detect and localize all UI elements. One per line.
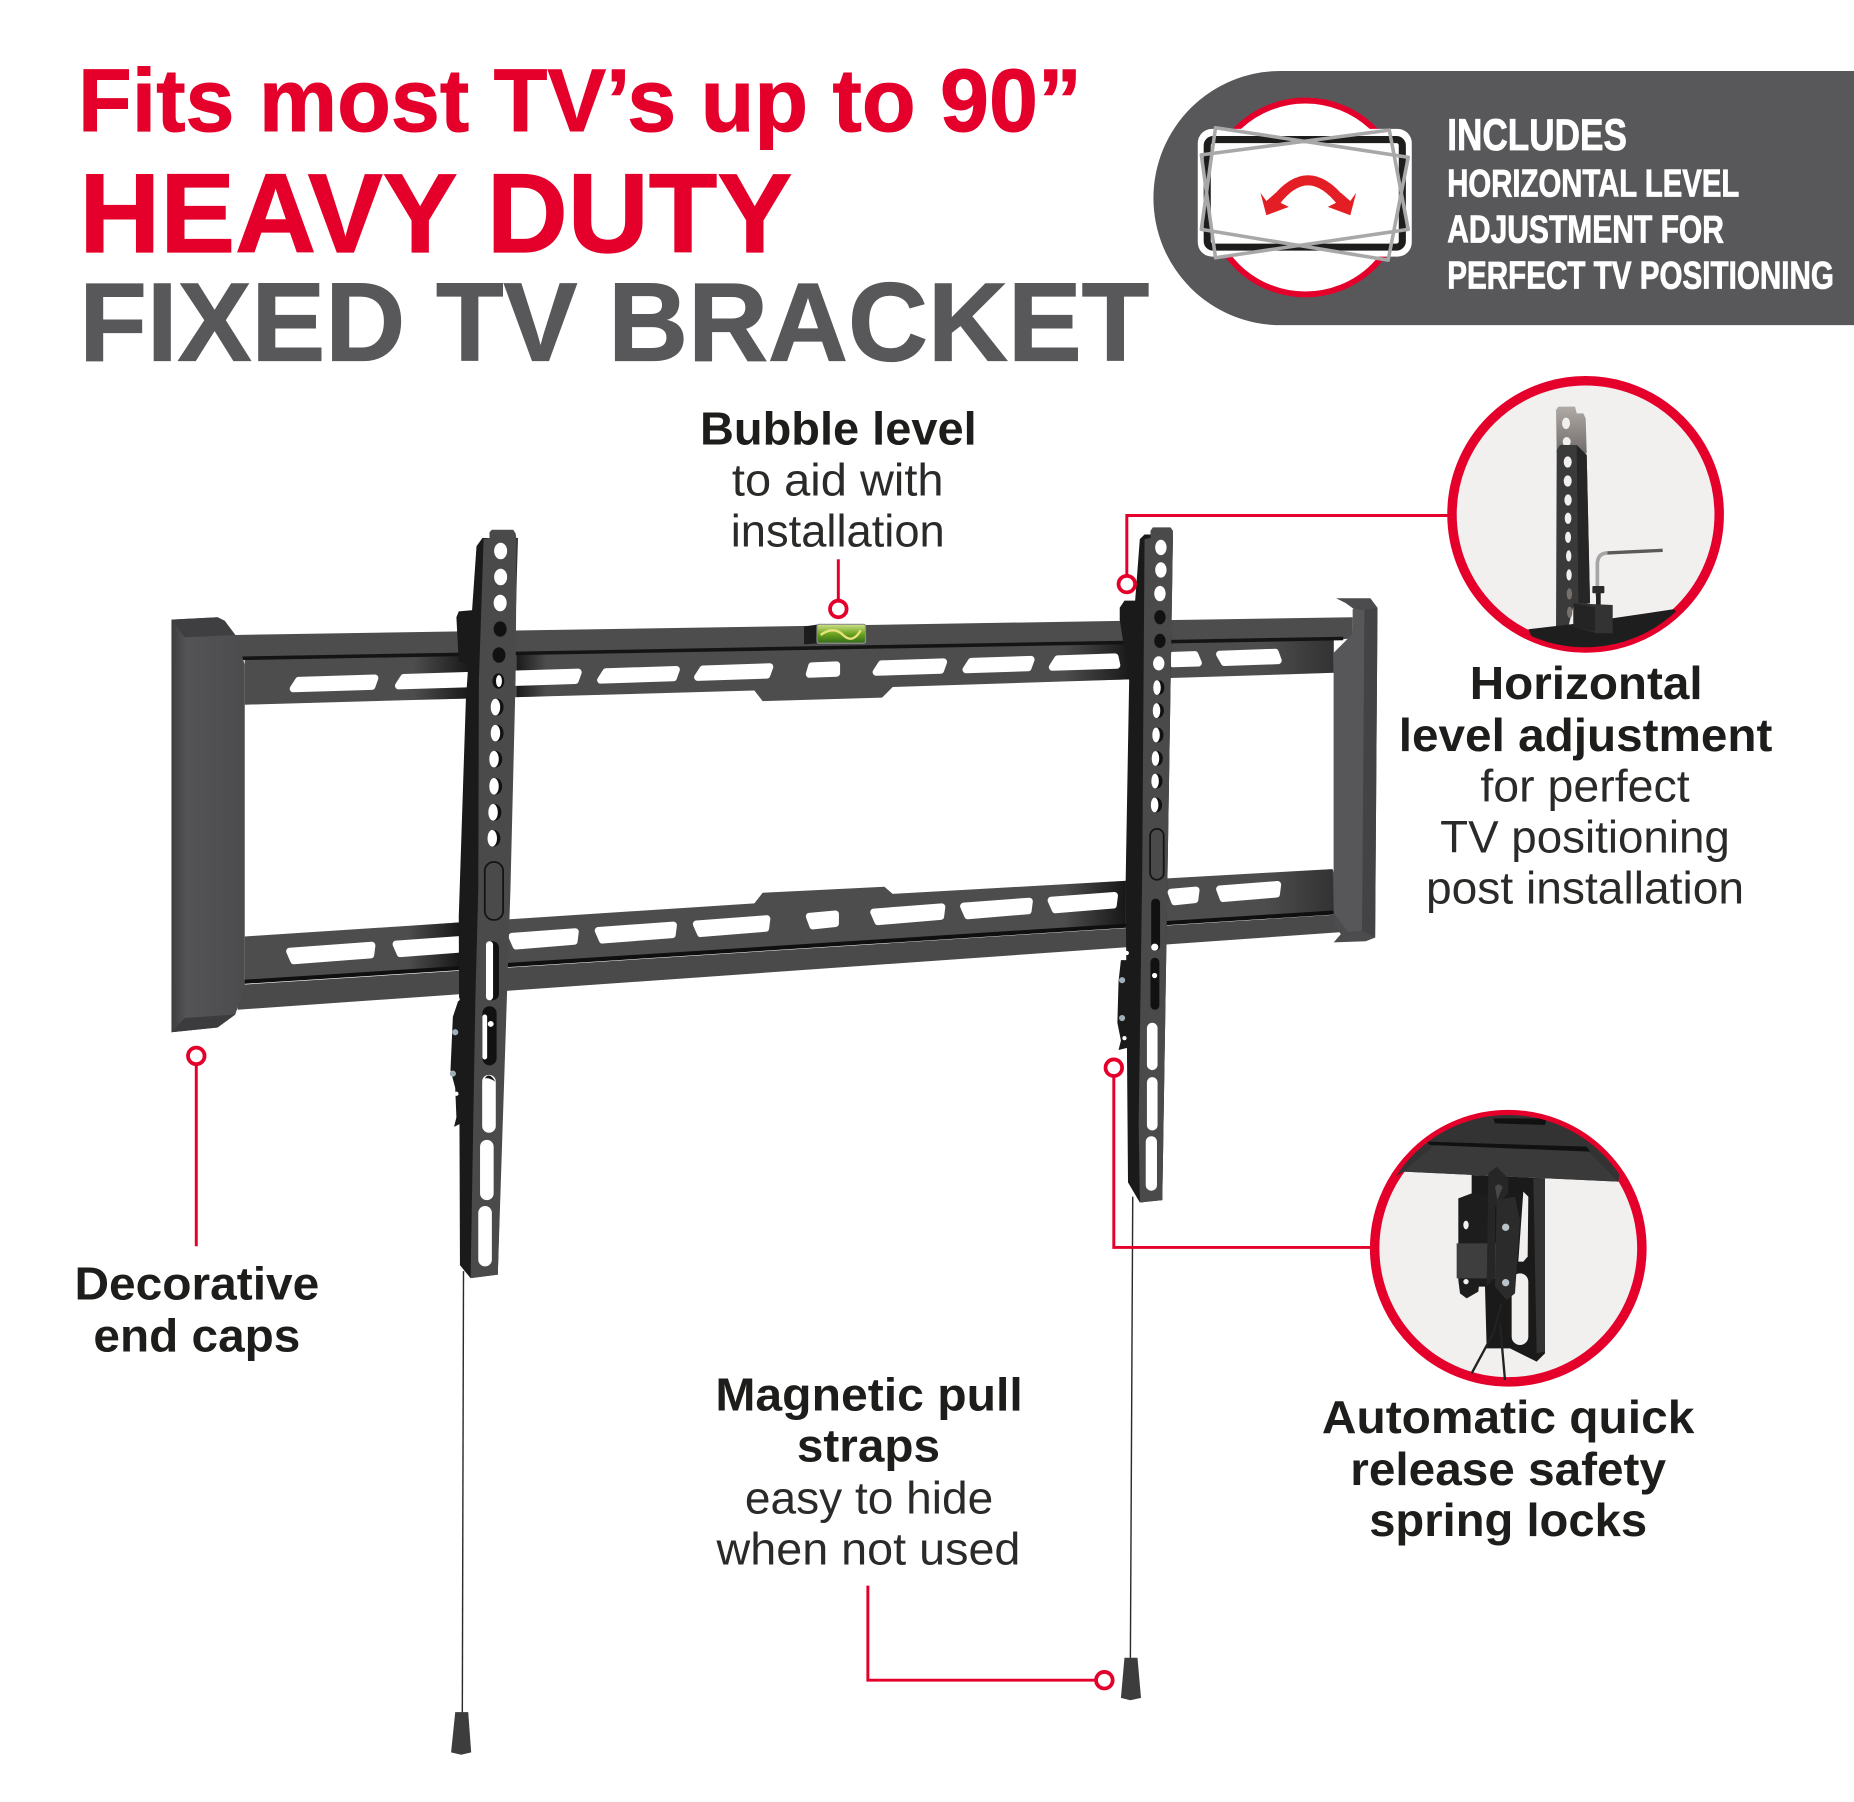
lock block left xyxy=(450,997,468,1127)
right end cap xyxy=(1334,598,1377,942)
leader: horizontal adjustment xyxy=(1119,516,1450,592)
leader: pull straps xyxy=(868,1586,1113,1688)
photo: level adjustment detail xyxy=(1452,381,1719,657)
mounting holes right xyxy=(1146,540,1167,1191)
panel: includes badge xyxy=(1153,71,1854,325)
right pull strap xyxy=(1121,1197,1141,1700)
callout: bubble level: installation xyxy=(731,505,945,556)
title: HEAVY DUTY xyxy=(79,150,792,276)
callout: bubble level xyxy=(700,403,977,617)
callout: bubble level: Bubble level xyxy=(700,403,977,455)
badge text: ADJUSTMENT FOR xyxy=(1447,208,1724,251)
callout: spring locks: spring locks xyxy=(1369,1494,1647,1546)
left end cap xyxy=(171,617,245,1032)
leader: bubble level xyxy=(830,559,847,617)
bracket xyxy=(171,527,1377,1755)
callout: spring locks: release safety xyxy=(1350,1443,1666,1495)
callout: magnetic pull straps: Magnetic pull xyxy=(715,1369,1023,1421)
callout: spring locks xyxy=(1106,1059,1695,1546)
lock block right xyxy=(1117,951,1133,1050)
callout: bubble level: to aid with xyxy=(732,454,944,505)
badge text: INCLUDES xyxy=(1447,109,1627,160)
callout: horizontal level adjustment xyxy=(1119,381,1772,913)
left arm xyxy=(450,530,518,1278)
badge text xyxy=(1447,109,1834,298)
callout: magnetic pull straps xyxy=(715,1369,1113,1688)
mounting holes left xyxy=(478,543,507,1266)
leader: spring locks xyxy=(1106,1059,1373,1247)
leader: end caps xyxy=(188,1048,205,1246)
callout: decorative end caps xyxy=(74,1048,319,1361)
lower rail xyxy=(232,869,1347,1010)
icon: tilting tv xyxy=(1198,101,1412,294)
title: FIXED TV BRACKET xyxy=(79,260,1149,385)
callout: decorative end caps: Decorative xyxy=(74,1257,319,1309)
badge text: HORIZONTAL LEVEL xyxy=(1447,162,1739,205)
title: Fits most TV’s up to 90” xyxy=(78,51,1082,150)
title xyxy=(78,51,1149,385)
icon: bubble level xyxy=(804,624,866,644)
callout: magnetic pull straps: when not used xyxy=(716,1523,1020,1574)
callout: spring locks: Automatic quick xyxy=(1322,1391,1695,1443)
callout: magnetic pull straps: straps xyxy=(797,1419,940,1471)
callout: horizontal level adjustment: post installation xyxy=(1426,862,1744,913)
upper rail xyxy=(225,617,1353,705)
callout: horizontal level adjustment: level adjustment xyxy=(1399,709,1772,761)
callout: horizontal level adjustment: for perfect xyxy=(1480,761,1690,812)
callout: magnetic pull straps: easy to hide xyxy=(745,1472,993,1523)
right arm xyxy=(1117,527,1173,1203)
callout: horizontal level adjustment: Horizontal xyxy=(1470,657,1703,709)
left pull strap xyxy=(451,1271,471,1755)
photo: spring lock detail xyxy=(1375,1107,1642,1382)
callout: decorative end caps: end caps xyxy=(93,1309,300,1361)
callout: horizontal level adjustment: TV positioning xyxy=(1440,812,1730,863)
